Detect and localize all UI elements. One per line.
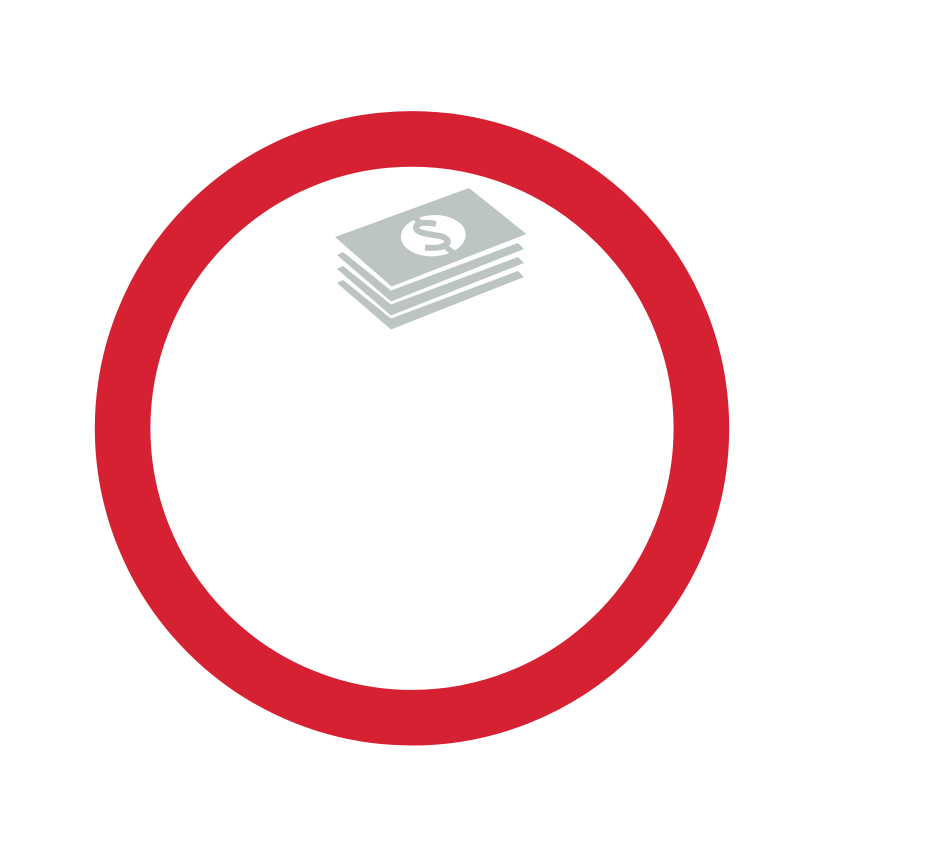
second bill	[337, 243, 524, 302]
bottom bill	[337, 271, 524, 330]
icon: stack of dollar bills	[335, 188, 526, 330]
dollar sign medallion	[400, 213, 467, 258]
top bill	[335, 188, 526, 286]
red ring	[123, 139, 701, 718]
third bill	[337, 257, 524, 316]
